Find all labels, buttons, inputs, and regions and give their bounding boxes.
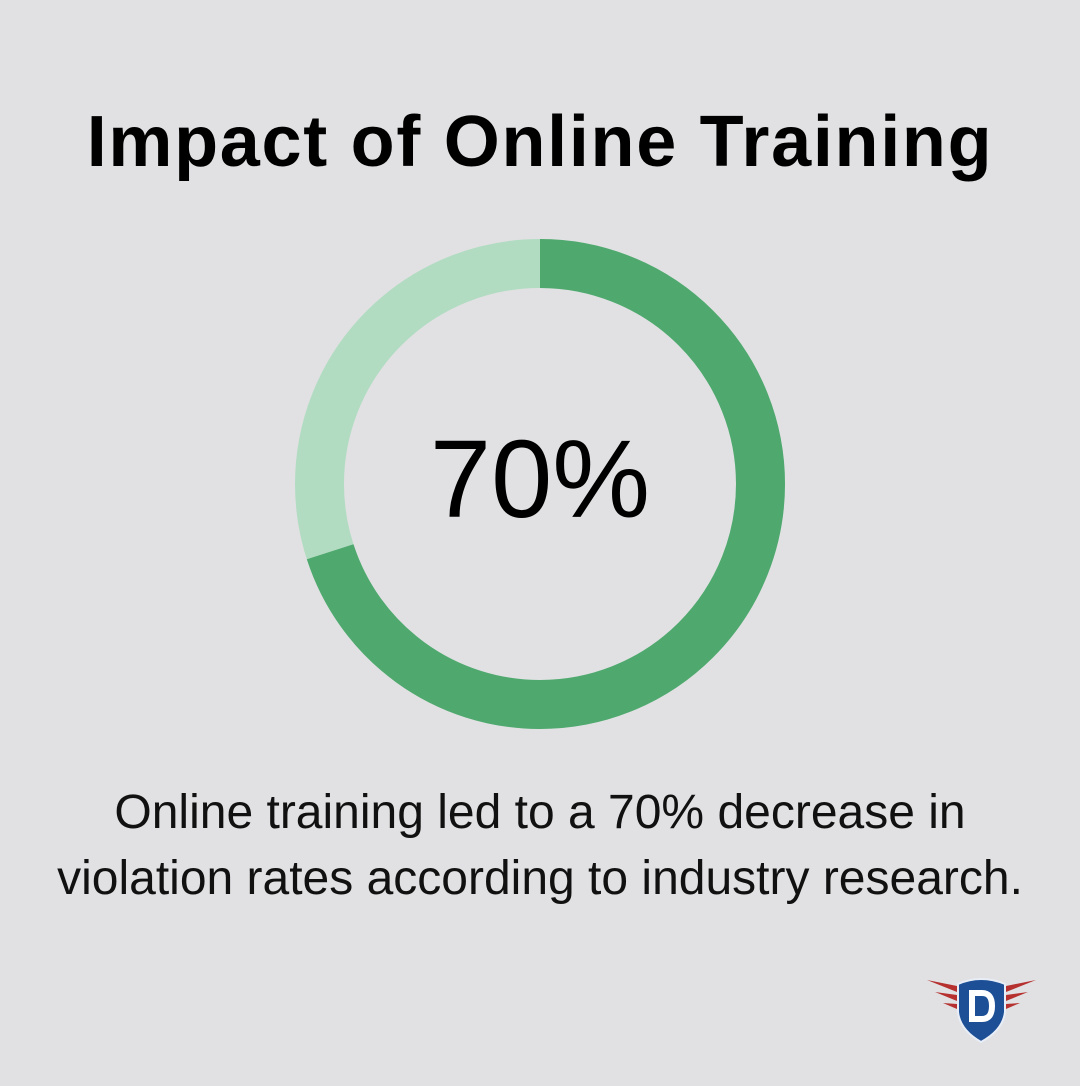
caption	[57, 786, 1023, 905]
title: Impact of Online Training	[87, 102, 993, 182]
center value: 70%	[430, 418, 650, 541]
caption: Online training led to a 70% decrease in	[114, 786, 966, 839]
caption: violation rates according to industry research.	[57, 852, 1023, 905]
icon: logo	[927, 978, 1036, 1043]
